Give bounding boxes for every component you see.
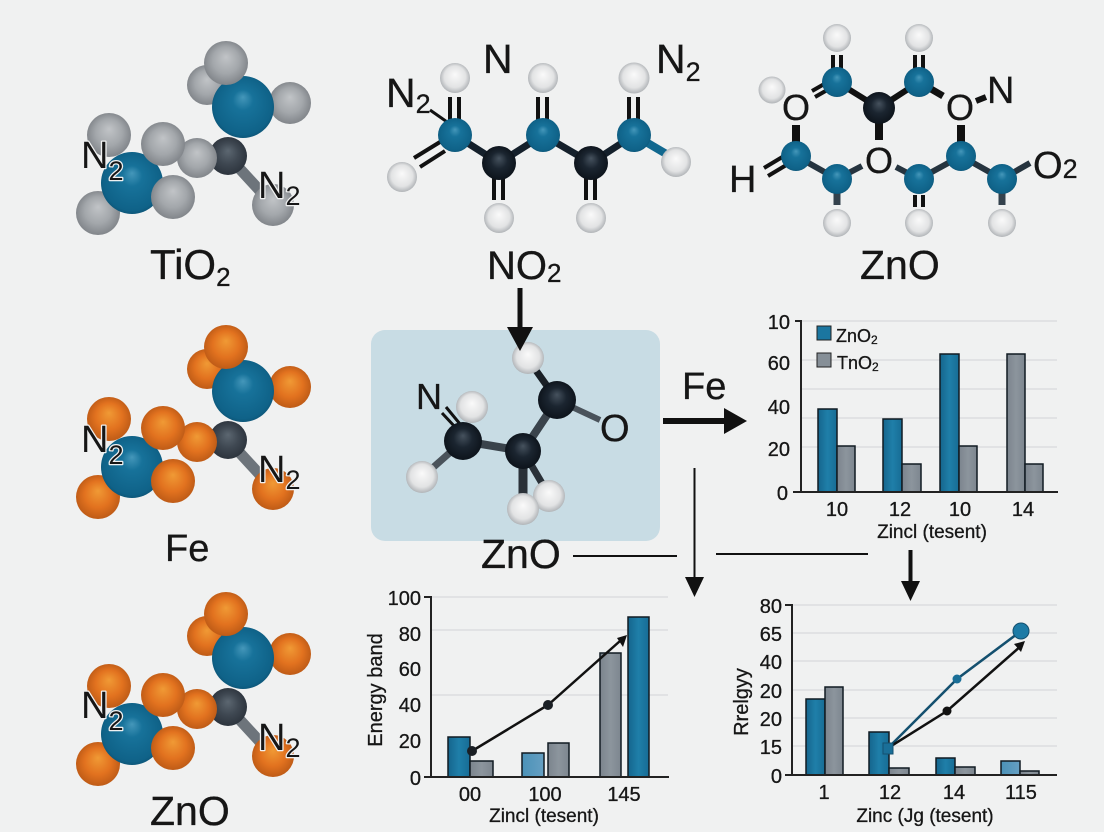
molecule: TiO2 grey and blue ball model: 2 xyxy=(285,181,300,211)
bar chart: top right xyxy=(768,312,1058,543)
bar chart: energy band: Zincl (tesent) xyxy=(489,806,599,827)
molecule: NO2 chain: N xyxy=(386,70,416,116)
molecule: TiO2 grey and blue ball model: N xyxy=(81,135,108,177)
molecule: TiO2 grey and blue ball model: N xyxy=(258,165,285,207)
trend lines xyxy=(883,623,1029,754)
label: NO2: NO xyxy=(487,244,547,288)
bar chart: energy band: 00 xyxy=(459,784,481,806)
bar chart: top right: 10 xyxy=(949,499,971,521)
molecule: Fe orange and blue ball model xyxy=(76,325,311,519)
bar chart: top right: 14 xyxy=(1012,499,1034,521)
molecule: Fe orange and blue ball model: N xyxy=(81,419,108,461)
bar chart: top right: 12 xyxy=(889,499,911,521)
bar chart: relegy: Rrelgyy xyxy=(731,668,753,736)
molecule: ZnO ring: O xyxy=(1033,145,1063,187)
bar chart: energy band: 100 xyxy=(388,588,421,610)
legend: 2 xyxy=(871,333,878,347)
legend: 2 xyxy=(872,360,879,374)
bar chart: relegy: 80 xyxy=(760,596,782,618)
molecule: ZnO orange and blue ball model: N xyxy=(81,685,108,727)
molecule: ZnO orange and blue ball model: 2 xyxy=(285,733,300,763)
molecule: NO2 chain: 2 xyxy=(686,57,701,87)
molecule: NO2 chain: 2 xyxy=(416,89,431,119)
bar chart: energy band xyxy=(365,588,669,827)
bar chart: top right: Zincl (tesent) xyxy=(877,522,987,543)
bar chart: relegy: 115 xyxy=(1005,782,1037,804)
bar chart: relegy: 0 xyxy=(771,766,782,788)
molecule: Fe orange and blue ball model: 2 xyxy=(108,440,123,470)
label: ZnO top right: ZnO xyxy=(860,242,940,288)
molecule: TiO2 grey and blue ball model: 2 xyxy=(108,156,123,186)
arrow: down to relegy chart xyxy=(901,550,920,601)
bar chart: energy band: Energy band xyxy=(365,633,387,747)
bar chart: top right: 10 xyxy=(826,499,848,521)
bar chart: energy band: 40 xyxy=(399,695,421,717)
bar chart: relegy: 12 xyxy=(879,782,901,804)
panel: central ZnO molecule: O xyxy=(600,408,630,450)
molecule: Fe orange and blue ball model: N xyxy=(258,449,285,491)
bar chart: energy band: 145 xyxy=(607,784,641,806)
bar chart: relegy: 40 xyxy=(760,652,782,674)
panel: central ZnO molecule: N xyxy=(416,376,442,417)
trend line xyxy=(467,635,627,756)
legend: ZnO xyxy=(836,326,871,346)
molecule: NO2 chain: N xyxy=(656,36,686,82)
bar chart: energy band: 60 xyxy=(399,659,421,681)
molecule: ZnO ring: H xyxy=(729,159,756,201)
connector: ZnO to right xyxy=(573,555,677,557)
bar chart: top right: 40 xyxy=(768,397,790,419)
bar chart: relegy: 15 xyxy=(760,737,782,759)
molecule: ZnO ring: O xyxy=(865,140,893,181)
arrow: NO2 down into panel xyxy=(507,288,533,351)
label: TiO2: TiO xyxy=(150,241,216,288)
bar chart: top right: 10 xyxy=(768,312,790,334)
bar chart: top right: 0 xyxy=(777,483,788,505)
panel: central ZnO molecule xyxy=(371,330,660,541)
label: Fe: Fe xyxy=(165,528,209,570)
bar chart: relegy: Zinc (Jg (tesent) xyxy=(856,806,994,827)
bar chart: relegy: 20 xyxy=(760,709,782,731)
bar chart: energy band: 100 xyxy=(528,784,562,806)
bar chart: relegy: 1 xyxy=(818,782,830,804)
molecule: ZnO ring xyxy=(729,24,1078,237)
bar chart: relegy: 20 xyxy=(760,681,782,703)
bar chart: energy band: 80 xyxy=(399,624,421,646)
molecule: NO2 chain xyxy=(386,36,701,233)
bar chart: relegy: 65 xyxy=(760,624,782,646)
molecule: ZnO orange and blue ball model xyxy=(76,592,311,786)
molecule: Fe orange and blue ball model: 2 xyxy=(285,465,300,495)
molecule: ZnO ring: O xyxy=(946,87,974,128)
label: Fe arrow: Fe xyxy=(682,366,726,408)
label: NO2: 2 xyxy=(547,258,561,288)
molecule: ZnO ring: N xyxy=(987,70,1014,112)
bar chart: relegy xyxy=(731,596,1057,827)
molecule: ZnO orange and blue ball model: 2 xyxy=(108,706,123,736)
bar chart: energy band: 20 xyxy=(399,731,421,753)
connector: horizontal to chart xyxy=(716,553,868,555)
label: TiO2: 2 xyxy=(216,262,231,292)
bar chart: relegy: 14 xyxy=(943,782,965,804)
molecule: ZnO orange and blue ball model: N xyxy=(258,717,285,759)
molecule: ZnO ring: O xyxy=(782,87,810,128)
molecule: NO2 chain: N xyxy=(483,36,513,82)
arrow: down to energy band chart xyxy=(685,468,704,597)
molecule: TiO2 grey and blue ball model xyxy=(76,41,311,235)
arrow: panel to top chart xyxy=(663,408,747,434)
legend xyxy=(817,326,879,374)
legend: TnO xyxy=(837,353,872,373)
bar chart: top right: 60 xyxy=(768,353,790,375)
bar chart: top right: 20 xyxy=(768,439,790,461)
label: ZnO center: ZnO xyxy=(481,531,561,577)
bar chart: energy band: 0 xyxy=(410,768,421,790)
molecule: ZnO ring: 2 xyxy=(1063,154,1078,184)
